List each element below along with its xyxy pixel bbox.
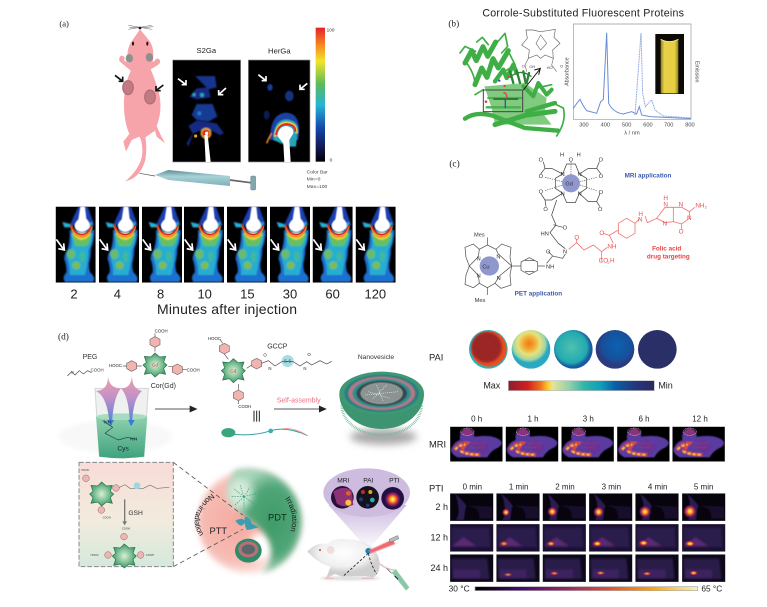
Gd chelate: N (561, 192, 565, 198)
yin-yang PTT PDT diagram (194, 464, 306, 576)
panel b: fluorescent proteins (448, 8, 700, 136)
time labels: 30 (283, 286, 297, 301)
2 h frames (450, 493, 725, 521)
folic acid label (647, 246, 690, 260)
PEG label and formula: COOH (91, 368, 104, 373)
minute labels: 0 min (463, 483, 482, 492)
folic acid group: N (663, 202, 668, 209)
Gd chelate (539, 153, 604, 249)
beaker with PEG, Cor(Gd), Cys: Cys (117, 446, 129, 453)
time labels: 2 (70, 286, 78, 301)
corrole structure: HO (547, 65, 553, 70)
GSH cleavage inset: HOOC (91, 553, 99, 557)
heme ligand highlight box (483, 75, 523, 112)
minute labels: 5 min (694, 483, 713, 492)
panel d top: synthesis (58, 329, 424, 458)
folic acid group: O (599, 230, 604, 237)
protein ribbon (460, 33, 564, 136)
minute labels: 3 min (602, 483, 621, 492)
folic acid group: N (687, 215, 692, 222)
yin-yang PTT PDT diagram: PTT (210, 526, 227, 536)
temperature color bar: 30 °C (449, 583, 470, 593)
Cu porphyrin: N (477, 273, 481, 279)
panel a: mouse imaging (56, 18, 396, 317)
MRI scan frames (450, 427, 725, 462)
folic acid group: O (679, 229, 684, 236)
S2Ga scan image (173, 60, 241, 162)
Gd chelate: O (569, 158, 574, 164)
Gd chelate: O (599, 158, 604, 164)
Gd chelate: O (543, 207, 548, 213)
MRI time labels: 0 h (471, 414, 482, 423)
time labels: 10 (197, 286, 212, 301)
MRI time labels (471, 414, 708, 423)
icon: syringe (139, 170, 256, 190)
panel label c: (c) (449, 159, 460, 170)
GSH cleavage inset: COOH (146, 553, 154, 557)
absorbance emission chart: 500 (622, 122, 631, 128)
Gd chelate: O (598, 207, 603, 213)
PAI legend: Max (483, 380, 501, 390)
panel d right: PAI row (429, 330, 725, 462)
small nanovesicle icon (235, 539, 262, 563)
folic acid group: 2 (705, 205, 708, 210)
Cu porphyrin: N (496, 255, 500, 261)
Cor(Gd) molecule: Gd (152, 363, 158, 368)
Gd chelate: O (599, 174, 604, 180)
PAI circle 3 (554, 330, 593, 369)
absorbance emission chart: Absorbance (564, 57, 570, 86)
panel d bottom: mechanism (78, 462, 410, 590)
heading HerGa: HerGa (268, 46, 291, 55)
zoom connector lines (173, 462, 243, 567)
Cor(Gd) molecule: COOH (155, 329, 168, 334)
absorbance emission chart: λ / nm (624, 130, 640, 136)
time labels: 15 (240, 286, 255, 301)
panel label a: (a) (59, 18, 69, 28)
panel label b: (b) (448, 19, 459, 30)
MRI row label: MRI (429, 440, 446, 450)
folic acid group: NH (607, 243, 617, 250)
imaging balloon: PTI (389, 477, 400, 484)
beaker with PEG, Cor(Gd), Cys: NH (104, 419, 112, 425)
Gd chelate: N (578, 172, 582, 178)
GCCP molecule: Gd (230, 368, 237, 373)
imaging balloon: PAI (363, 477, 374, 484)
12 h frames (450, 524, 725, 552)
absorbance emission chart: 300 (579, 122, 589, 128)
Cor(Gd) molecule: COOH (187, 368, 200, 373)
corrole structure (522, 29, 563, 72)
GSH cleavage inset: COOH (103, 516, 111, 520)
color scale bar: Max=100 (307, 184, 328, 190)
absorbance emission chart: 800 (685, 122, 695, 128)
MRI time labels: 1 h (527, 414, 539, 423)
time labels: 8 (157, 286, 164, 301)
Gd chelate: O (539, 174, 544, 180)
drug release burst icon (232, 485, 257, 508)
Cu porphyrin (465, 233, 567, 304)
Cu porphyrin: Cu (482, 264, 490, 270)
GCCP molecule: HOOC (208, 336, 221, 341)
color scale bar (307, 27, 335, 190)
temperature color bar (449, 583, 722, 593)
folic acid group: H (663, 195, 668, 202)
PAI legend (483, 380, 673, 391)
yin-yang PTT PDT diagram: Irradiation (285, 496, 298, 532)
folic acid group: H (610, 258, 615, 265)
hour labels: 24 h (430, 563, 448, 573)
corrole structure: O (522, 63, 525, 68)
temperature color bar: 65 °C (701, 583, 722, 593)
Cu porphyrin: O (546, 249, 551, 255)
Cu porphyrin: NH (546, 265, 554, 271)
title: Corrole-Substituted Fluorescent Proteins (482, 8, 684, 20)
Gd chelate: N (578, 192, 582, 198)
absorbance emission chart: 400 (601, 122, 610, 128)
panel d right: PTI grid (429, 483, 725, 593)
PAI label: PAI (429, 352, 443, 362)
PAI circle 2 (512, 330, 550, 369)
Gd chelate: Gd (565, 182, 573, 188)
GSH cleavage inset: HOOC (81, 468, 89, 472)
folic acid group: NH (695, 202, 705, 209)
Gd chelate: O (539, 158, 544, 164)
imaging balloon: MRI (337, 477, 350, 484)
GCCP molecule: O (263, 353, 267, 358)
Cu porphyrin: N (563, 249, 567, 255)
PAI legend: Min (658, 380, 673, 390)
Gd chelate: HN (541, 232, 549, 238)
PEG label and formula: PEG (83, 354, 97, 361)
folic acid group (569, 195, 708, 265)
color scale bar: 100 (327, 27, 335, 32)
color scale bar: Min=0 (307, 176, 321, 182)
absorbance emission chart: 700 (664, 122, 673, 128)
GCCP molecule (208, 336, 332, 409)
absorbance emission chart: 600 (643, 122, 653, 128)
imaging balloon (323, 468, 410, 550)
minute labels: 2 min (555, 483, 575, 492)
yin-yang PTT PDT diagram: Non-irradiation (194, 494, 214, 536)
folic acid group: N (679, 202, 684, 209)
yin-yang PTT PDT diagram: PDT (268, 512, 287, 522)
folic acid group: N (638, 216, 643, 223)
time labels (70, 286, 386, 301)
hour labels: 12 h (430, 532, 448, 542)
cuvette photo (655, 34, 684, 94)
Cu porphyrin: N (477, 257, 481, 263)
Gd chelate: O (563, 226, 568, 232)
GCCP molecule: O (307, 352, 311, 357)
Cor(Gd) molecule (109, 329, 200, 377)
minute labels: 1 min (509, 483, 528, 492)
folic acid group: 2 (607, 260, 610, 265)
Cu porphyrin: Mes (475, 298, 486, 304)
PTI row label: PTI (429, 483, 444, 493)
Gd chelate: N (561, 172, 565, 178)
24 h frames (450, 554, 725, 582)
micelle fragment icon (235, 517, 259, 530)
strip of time-lapse scans (56, 207, 396, 283)
color scale bar: 0 (330, 157, 333, 162)
folic acid group: N (663, 220, 668, 227)
reaction arrow 1 (155, 406, 197, 412)
absorbance emission chart: Emission (694, 61, 700, 83)
GSH cleavage inset: GSH (128, 510, 143, 517)
Gd chelate: H (560, 153, 564, 159)
PEG label and formula (67, 354, 104, 376)
GSH cleavage inset (79, 462, 173, 568)
color scale bar: Color Bar (307, 169, 328, 175)
minute labels (463, 483, 713, 492)
minute labels: 4 min (648, 483, 667, 492)
Cu porphyrin: Mes (474, 233, 485, 239)
self-assembly arrow: Self-assembly (277, 398, 321, 405)
PEG label and formula: O (71, 369, 74, 374)
Cu porphyrin: N (497, 276, 501, 282)
GCCP molecule: COOH (238, 404, 251, 409)
MRI time labels: 6 h (638, 414, 650, 423)
nanovesicle label: Nanovesicle (358, 354, 394, 361)
Cor(Gd) molecule: HOOC (109, 363, 122, 368)
mouse illustration (115, 25, 165, 181)
panel label d: (d) (58, 331, 69, 342)
GSH cleavage inset: COOH (122, 526, 130, 530)
MRI time labels: 12 h (692, 414, 708, 423)
white rat illustration (307, 536, 399, 580)
corrole structure: O (560, 64, 563, 69)
self-assembly arrow (274, 398, 326, 412)
time labels: 120 (364, 286, 386, 301)
panel c: molecular structure (449, 153, 708, 304)
HerGa scan image (248, 60, 310, 162)
PAI circle 1 (469, 330, 508, 369)
axis caption: Minutes after injection (157, 301, 297, 317)
PET application label: PET application (515, 291, 562, 298)
folic acid group: CO (599, 258, 608, 265)
folic acid label: Folic acid (652, 246, 681, 253)
folic acid group: H (638, 211, 643, 218)
Gd chelate: O (539, 190, 544, 196)
nanovesicle illustration (339, 372, 424, 445)
PAI circle 5 (638, 330, 677, 369)
arrow to corrole structure (523, 68, 540, 90)
hour labels: 2 h (435, 502, 448, 512)
time labels: 60 (325, 286, 340, 301)
PAI circle 4 (596, 330, 634, 369)
beaker with PEG, Cor(Gd), Cys (58, 375, 172, 458)
GCCP molecule: S-S (284, 359, 291, 364)
heading S2Ga: S2Ga (197, 46, 217, 55)
MRI application label: MRI application (625, 172, 672, 179)
folic acid label: drug targeting (647, 253, 690, 260)
folic acid group: O (574, 234, 579, 241)
Gd chelate: O (599, 190, 604, 196)
MRI time labels: 3 h (583, 414, 594, 423)
corrole structure: OH (529, 64, 535, 69)
Cor(Gd) label: Cor(Gd) (151, 383, 176, 390)
amphiphile monomer icon (221, 428, 308, 437)
GCCP label: GCCP (267, 344, 288, 351)
Gd chelate: H (577, 153, 581, 159)
time labels: 4 (114, 286, 121, 301)
GCCP molecule: N (303, 366, 306, 371)
icon: injection syringe (387, 568, 409, 591)
GCCP molecule: N (268, 366, 271, 371)
hour labels (430, 502, 448, 573)
absorbance emission chart (564, 24, 700, 136)
beaker with PEG, Cor(Gd), Cys: NH (130, 437, 138, 443)
equivalent mark (254, 411, 259, 422)
